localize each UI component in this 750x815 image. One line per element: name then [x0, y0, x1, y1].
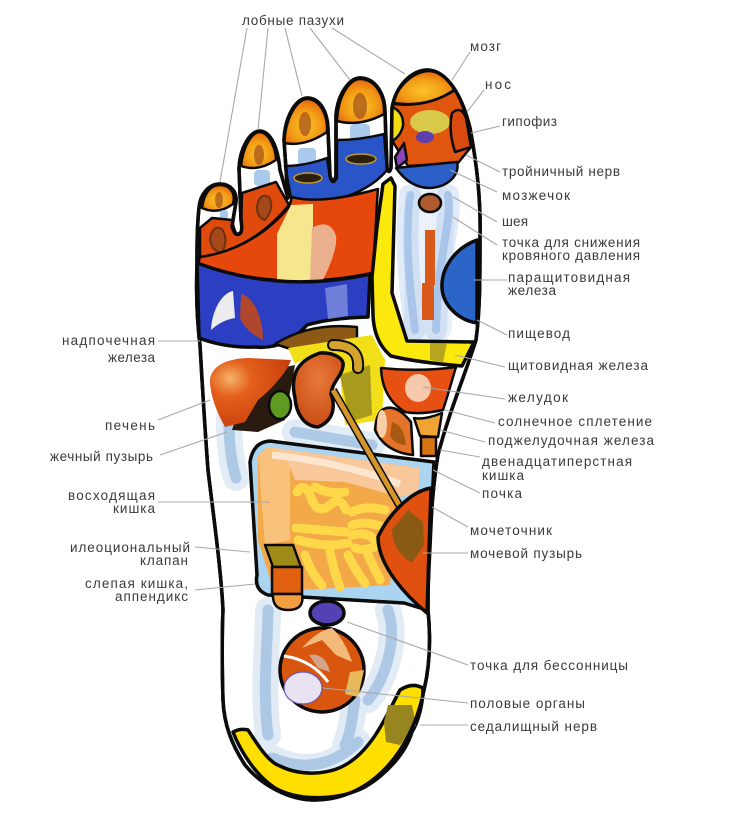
label: cecum and appendix: аппендикс	[115, 589, 188, 604]
frontal sinus: fourth toe	[337, 79, 384, 123]
label: ileocecal valve: клапан	[140, 553, 188, 568]
trigeminal purple	[395, 143, 407, 168]
frontal sinus: second toe	[241, 132, 276, 168]
label: oesophagus: пищевод	[508, 326, 570, 341]
label: kidney: почка	[482, 486, 522, 501]
transverse colon	[268, 447, 420, 497]
insomnia point	[310, 601, 344, 625]
duodenum	[421, 437, 436, 456]
liver	[210, 358, 291, 427]
label: neck: шея	[502, 214, 528, 229]
frontal sinus: little toe	[202, 185, 234, 211]
label: nose: нос	[485, 77, 511, 92]
stomach	[381, 367, 456, 413]
nose lobe	[451, 110, 471, 152]
ureter	[333, 390, 402, 510]
big toe washes	[407, 195, 449, 330]
label: ascending colon: восходящая	[68, 488, 155, 503]
label: insomnia point: точка для бессонницы	[470, 658, 628, 673]
label: cerebellum: мозжечок	[502, 188, 570, 203]
label: sciatic nerve: седалищный нерв	[470, 719, 597, 734]
eye zone	[285, 134, 387, 201]
appendix	[273, 594, 302, 610]
foot silhouette	[197, 70, 480, 800]
solar plexus inner	[390, 422, 406, 445]
toe nose marks	[215, 93, 367, 208]
gall bladder	[269, 391, 291, 419]
ascending colon	[258, 447, 290, 545]
label: pituitary: гипофиз	[502, 114, 557, 129]
label: adrenal gland: железа	[108, 350, 155, 365]
brain and pituitary zone	[393, 90, 471, 166]
lung zone	[197, 263, 370, 347]
label: trigeminal nerve: тройничный нерв	[502, 164, 620, 179]
label: ascending colon: кишка	[113, 501, 155, 516]
genital circle	[280, 628, 364, 712]
label: parathyroid: железа	[508, 283, 556, 298]
blue watercolour washes	[229, 400, 391, 767]
label: parathyroid: паращитовидная	[508, 270, 630, 285]
solar plexus	[375, 408, 413, 455]
label: liver: печень	[105, 418, 155, 433]
spine and shoulder zone	[198, 189, 378, 281]
label: blood pressure point: кровяного давления	[502, 248, 640, 263]
foot edge re-stroke	[197, 70, 480, 800]
label: adrenal gland: надпочечная	[62, 333, 155, 348]
brain cap	[393, 71, 454, 104]
hip bands	[430, 343, 447, 362]
sciatic nerve patch	[384, 705, 416, 745]
liver shadow	[232, 365, 295, 432]
brown upper abdomen band	[275, 326, 357, 352]
ears	[210, 196, 271, 252]
stomach highlight	[405, 374, 431, 402]
label: frontal sinuses: лобные пазухи	[242, 13, 344, 28]
colon highlight	[272, 455, 400, 484]
yellow half moon	[392, 107, 403, 141]
label: duodenum: двенадцатиперстная	[482, 454, 632, 469]
bladder	[378, 488, 431, 613]
label: genitals: половые органы	[470, 696, 585, 711]
frontal sinus: third toe	[284, 99, 327, 144]
small intestine	[296, 487, 385, 587]
label: gall bladder: жечный пузырь	[50, 449, 153, 464]
oesophagus	[422, 230, 435, 320]
neck spot	[419, 194, 441, 212]
label: bladder: мочевой пузырь	[470, 546, 582, 561]
label: solar plexus: солнечное сплетение	[498, 414, 652, 429]
pituitary	[416, 131, 434, 143]
label: blood pressure point: точка для снижения	[502, 235, 640, 250]
label: ureter: мочеточник	[470, 523, 552, 538]
pale patch on lung zone	[325, 284, 348, 319]
adrenal	[333, 345, 358, 368]
leader lines	[158, 28, 507, 725]
heel band	[233, 685, 423, 798]
yellow band: thyroid	[372, 178, 474, 366]
label: brain: мозг	[470, 39, 501, 54]
parathyroid half circle	[442, 240, 477, 323]
intestine base	[258, 447, 420, 590]
adrenal fill	[333, 345, 358, 368]
pancreas	[414, 413, 442, 437]
label: cecum and appendix: слепая кишка,	[85, 576, 188, 591]
heart	[310, 224, 336, 282]
ileocecal valve	[265, 545, 301, 567]
yellow abdomen	[288, 335, 385, 425]
cecum	[272, 567, 302, 594]
sole zones	[197, 71, 477, 798]
solar plexus highlight	[377, 410, 387, 438]
lungs	[211, 291, 263, 340]
ureter fill	[333, 390, 402, 510]
labels	[50, 13, 654, 734]
olive shade	[340, 365, 372, 422]
genital details	[284, 628, 364, 704]
label: pancreas: поджелудочная железа	[488, 433, 654, 448]
brain	[410, 110, 450, 134]
toe washes	[220, 124, 370, 222]
ear zone	[200, 182, 289, 257]
intestine box	[250, 441, 434, 610]
bladder inner	[392, 510, 424, 563]
spine highlight	[277, 204, 313, 284]
label: ileocecal valve: илеоциональный	[70, 540, 190, 555]
label: stomach: желудок	[508, 390, 568, 405]
eyes	[294, 154, 376, 183]
kidney	[293, 353, 343, 427]
cerebellum	[396, 162, 457, 188]
label: duodenum: кишка	[482, 468, 524, 483]
label: thyroid: щитовидная железа	[508, 358, 648, 373]
